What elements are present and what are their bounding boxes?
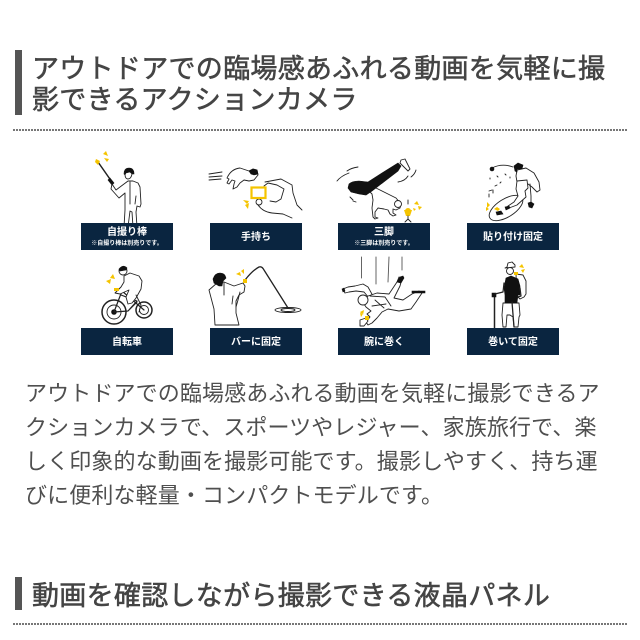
body text: びに便利な軽量・コンパクトモデルです。 bbox=[25, 483, 443, 508]
body text: しく印象的な動画を撮影可能です。撮影しやすく、持ち運 bbox=[25, 449, 598, 474]
panel: tripod bbox=[337, 159, 430, 250]
icon: cat and hand holding camera bbox=[209, 168, 302, 218]
label: bicycle: 自転車 bbox=[112, 335, 142, 348]
panel: arm mount bbox=[338, 257, 430, 355]
icon: cyclist bbox=[102, 266, 152, 324]
icon: selfie stick person bbox=[95, 151, 141, 227]
label: tripod: 三脚 bbox=[374, 225, 394, 238]
label: handheld: 手持ち bbox=[241, 230, 271, 243]
body text: アウトドアでの臨場感あふれる動画を気軽に撮影できるア bbox=[25, 381, 600, 406]
label: tripod bbox=[338, 223, 430, 250]
label: selfie stick: ※自撮り棒は別売りです。 bbox=[91, 239, 163, 247]
panel: adhesive mount bbox=[467, 163, 559, 250]
heading: section 1: 影できるアクションカメラ bbox=[32, 85, 358, 115]
label: arm mount: 腕に巻く bbox=[364, 335, 404, 348]
heading: section 2: 動画を確認しながら撮影できる液晶パネル bbox=[32, 581, 550, 611]
icon: hiker bbox=[492, 262, 526, 328]
panel: handheld bbox=[209, 168, 302, 250]
panel: bar mount bbox=[209, 267, 302, 355]
heading: section 1: アウトドアでの臨場感あふれる動画を気軽に撮 bbox=[32, 54, 605, 84]
heading: section 1 bbox=[32, 54, 605, 115]
icon: angler bbox=[209, 267, 301, 325]
label: selfie stick: 自撮り棒 bbox=[107, 225, 147, 238]
panel: selfie stick bbox=[81, 151, 173, 250]
icon: surfer bbox=[485, 163, 540, 226]
heading bar: section 1 bbox=[15, 50, 22, 115]
icon: breakdancer and tripod camera bbox=[337, 159, 422, 222]
body text bbox=[25, 381, 600, 508]
label: tripod: ※三脚は別売りです。 bbox=[354, 239, 414, 247]
heading bar: section 2 bbox=[15, 577, 22, 610]
label: wrap mount: 巻いて固定 bbox=[488, 335, 538, 348]
label: adhesive mount: 貼り付け固定 bbox=[483, 230, 543, 243]
label: bar mount: バーに固定 bbox=[231, 336, 281, 348]
panel: bicycle bbox=[81, 266, 173, 355]
panel: wrap mount bbox=[467, 262, 559, 355]
label: selfie stick bbox=[81, 223, 173, 250]
icon: skydiver bbox=[342, 257, 425, 326]
body text: クションカメラで、スポーツやレジャー、家族旅行で、楽 bbox=[25, 415, 597, 440]
